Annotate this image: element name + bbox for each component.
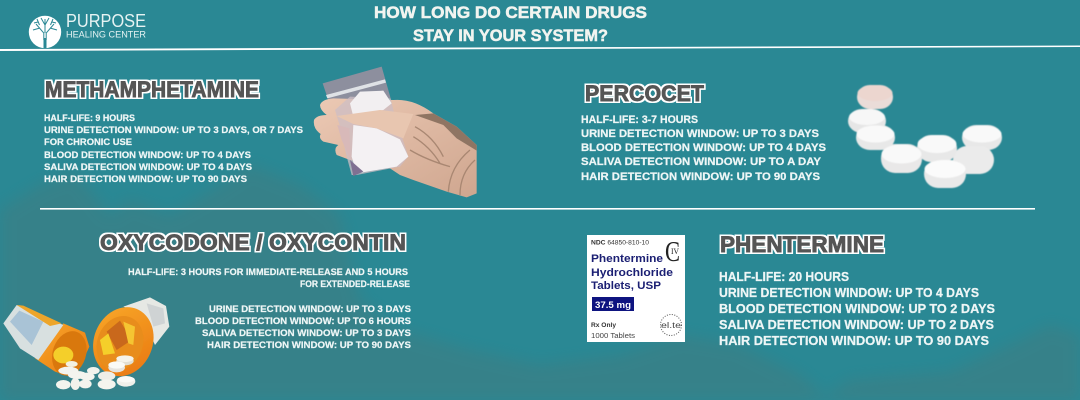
text block: methamphetamine facts: FOR CHRONIC USE — [44, 137, 133, 148]
panel: oxycodone / oxycontin — [3, 230, 412, 390]
image: phentermine package label: 1000 Tablets — [591, 333, 636, 340]
logo wordmark: PURPOSE — [66, 10, 146, 31]
logo wordmark — [66, 10, 146, 40]
heading: oxycodone / oxycontin: OXYCODONE / OXYCONTIN — [100, 230, 406, 255]
background mountains — [0, 165, 1080, 400]
title: STAY IN YOUR SYSTEM? — [413, 26, 608, 45]
image: white pills — [848, 85, 1002, 188]
text block: phentermine facts: HAIR DETECTION WINDOW: UP TO 90 DAYS — [719, 333, 989, 348]
text block: methamphetamine facts: SALIVA DETECTION WINDOW: UP TO 4 DAYS — [44, 162, 253, 173]
image: spilled orange pill bottles — [3, 297, 169, 390]
text block: methamphetamine facts: HALF-LIFE: 9 HOURS — [44, 113, 136, 124]
text block: percocet facts: BLOOD DETECTION WINDOW: UP TO 4 DAYS — [581, 142, 827, 154]
text block: percocet facts: URINE DETECTION WINDOW: UP TO 3 DAYS — [581, 128, 820, 140]
text block: oxycodone facts: URINE DETECTION WINDOW: UP TO 3 DAYS — [209, 304, 412, 315]
title — [374, 3, 647, 45]
text block: percocet facts: HALF-LIFE: 3-7 HOURS — [581, 114, 698, 126]
heading: phentermine: PHENTERMINE — [720, 232, 884, 257]
text block: oxycodone facts — [128, 267, 412, 351]
title: HOW LONG DO CERTAIN DRUGS — [374, 3, 647, 22]
image: phentermine package label: el.te — [661, 321, 682, 330]
header logo — [29, 10, 146, 49]
text block: oxycodone facts: HALF-LIFE: 3 HOURS FOR IMMEDIATE-RELEASE AND 5 HOURS — [128, 267, 409, 278]
logo tree badge — [29, 16, 61, 49]
text block: phentermine facts — [719, 269, 995, 348]
image: phentermine package label: Tablets, USP — [591, 280, 661, 292]
text block: oxycodone facts: SALIVA DETECTION WINDOW: UP TO 3 DAYS — [202, 328, 412, 339]
image: hand holding bag of crystals — [314, 67, 477, 197]
image: phentermine package label — [587, 235, 685, 342]
text block: percocet facts — [581, 114, 827, 183]
heading: methamphetamine: METHAMPHETAMINE — [45, 77, 259, 102]
text block: oxycodone facts: HAIR DETECTION WINDOW: UP TO 90 DAYS — [207, 340, 412, 351]
text block: percocet facts: SALIVA DETECTION WINDOW: UP TO A DAY — [581, 156, 822, 168]
text block: phentermine facts: HALF-LIFE: 20 HOURS — [719, 269, 849, 284]
text block: percocet facts: HAIR DETECTION WINDOW: UP TO 90 DAYS — [581, 171, 821, 183]
panel: percocet — [581, 81, 1002, 188]
text block: oxycodone facts: FOR EXTENDED-RELEASE — [300, 279, 411, 290]
image: phentermine package label: Phentermine — [591, 253, 663, 265]
image: phentermine package label: Rx Only — [591, 322, 616, 329]
text block: phentermine facts: SALIVA DETECTION WINDOW: UP TO 2 DAYS — [719, 317, 994, 332]
image: phentermine package label: NDC 64850-810-10 — [591, 240, 650, 246]
text block: phentermine facts: BLOOD DETECTION WINDOW: UP TO 2 DAYS — [719, 301, 995, 316]
image: phentermine package label: IV — [671, 247, 679, 256]
text block: phentermine facts: URINE DETECTION WINDOW: UP TO 4 DAYS — [719, 285, 979, 300]
text block: oxycodone facts: BLOOD DETECTION WINDOW: UP TO 6 HOURS — [195, 316, 412, 327]
heading: percocet: PERCOCET — [585, 81, 705, 106]
image: phentermine package label: C — [665, 236, 680, 268]
text block: methamphetamine facts: URINE DETECTION WINDOW: UP TO 3 DAYS, OR 7 DAYS — [44, 125, 304, 136]
text block: methamphetamine facts — [44, 113, 304, 185]
text block: methamphetamine facts: BLOOD DETECTION WINDOW: UP TO 4 DAYS — [44, 150, 252, 161]
panel: phentermine — [587, 232, 995, 348]
image: phentermine package label: Hydrochloride — [591, 267, 673, 279]
logo wordmark: HEALING CENTER — [66, 30, 146, 40]
image: phentermine package label: 37.5 mg — [595, 300, 631, 311]
text block: methamphetamine facts: HAIR DETECTION WINDOW: UP TO 90 DAYS — [44, 174, 248, 185]
panel: methamphetamine — [44, 67, 477, 197]
